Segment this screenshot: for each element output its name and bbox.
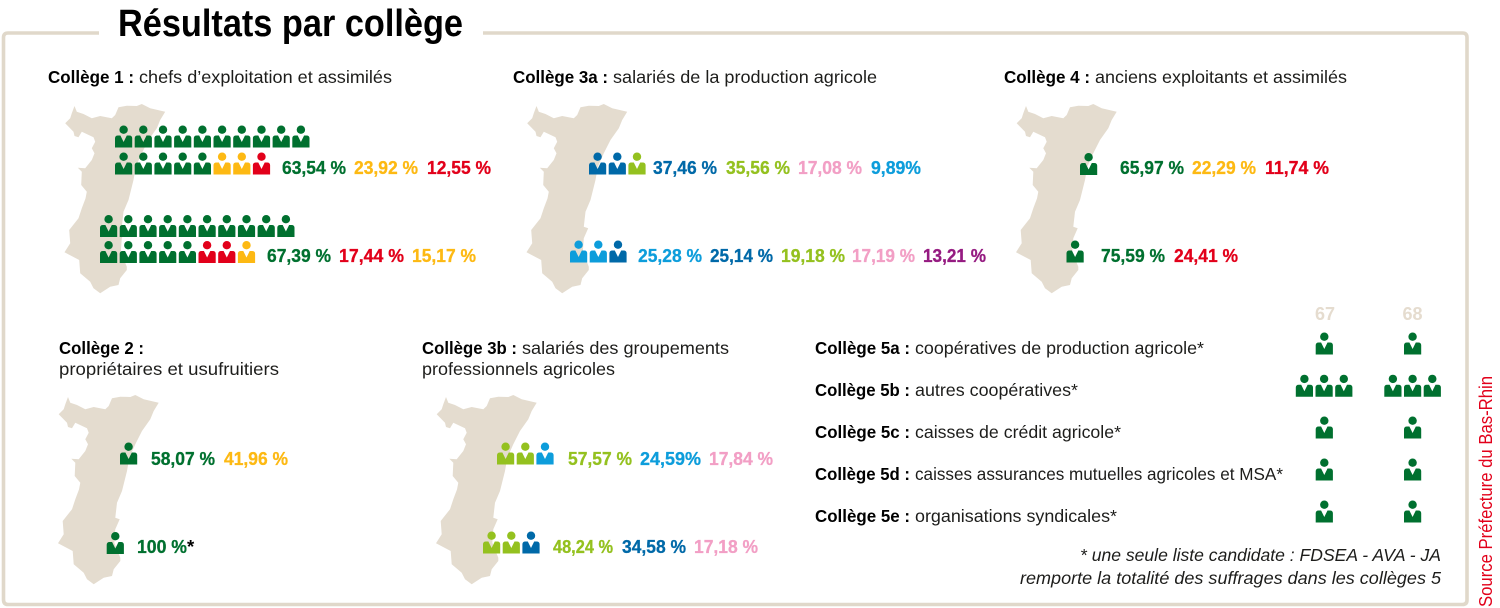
- percentages: Haut-Rhin collège 3b: 34,58 %: [622, 536, 686, 557]
- footnote: * une seule liste candidate : FDSEA - AVA - JA: [1080, 545, 1441, 565]
- percentage: Haut-Rhin collège 2: *: [187, 536, 195, 557]
- percentages: Bas-Rhin collège 4: [1120, 157, 1329, 178]
- icons: Haut-Rhin collège 3a: [570, 240, 627, 262]
- panel: collège 3b: [422, 338, 773, 584]
- heading: collège 1: chefs d’exploitation et assimilés: [139, 67, 392, 87]
- row: collège 5a: [815, 332, 1421, 358]
- percentages: Haut-Rhin collège 3a: 13,21 %: [923, 245, 986, 266]
- heading: collège 3a: salariés de la production agricole: [613, 67, 877, 87]
- icon: Bas-Rhin collège 2: [120, 442, 137, 464]
- row: collège 5b: [815, 375, 1441, 400]
- percentages: Haut-Rhin collège 1: 67,39 %: [267, 245, 331, 266]
- heading: collège 2: [59, 338, 279, 379]
- map: collège 4: [1016, 104, 1117, 293]
- percentages: Bas-Rhin collège 3a: [653, 157, 921, 178]
- icons: Haut-Rhin collège 3b: [483, 532, 540, 554]
- panel: collège 1: [48, 67, 491, 293]
- panel: collèges 5: [815, 304, 1441, 588]
- heading: collège 3b: professionnels agricoles: [422, 359, 615, 379]
- percentages: Haut-Rhin collège 3b: 17,18 %: [694, 536, 758, 557]
- percentages: Bas-Rhin collège 3b: 57,57 %: [568, 448, 632, 469]
- percentages: Bas-Rhin collège 2: 41,96 %: [224, 448, 288, 469]
- footnote: [1020, 545, 1441, 588]
- percentages: Bas-Rhin collège 1: 12,55 %: [427, 157, 491, 178]
- percentages: Bas-Rhin collège 4: 11,74 %: [1265, 157, 1329, 178]
- percentages: Bas-Rhin collège 3b: 17,84 %: [709, 448, 773, 469]
- percentages: Bas-Rhin collège 1: 63,54 %: [282, 157, 346, 178]
- map: collège 2: [58, 395, 159, 584]
- icons: Bas-Rhin collège 1: [115, 126, 310, 174]
- panel: collège 2: [58, 338, 288, 584]
- icon: Bas-Rhin collège 4: [1080, 153, 1097, 175]
- map: collège 3a: [526, 104, 627, 293]
- percentages: Haut-Rhin collège 4: 24,41 %: [1174, 245, 1238, 266]
- panel: collège 4: [1004, 67, 1347, 293]
- percentages: Haut-Rhin collège 3b: 48,24 %: [553, 536, 613, 557]
- column header: 67: 67: [1315, 304, 1335, 324]
- footnote: remporte la totalité des suffrages dans les collèges 5: [1020, 568, 1441, 588]
- row: collège 5d: caisses assurances mutuelles agricoles et MSA*: [915, 464, 1283, 484]
- percentages: Haut-Rhin collège 1: [267, 245, 476, 266]
- heading: collège 2: Collège 2 :: [59, 338, 144, 358]
- row: collège 5c: Collège 5c :: [815, 422, 910, 442]
- percentages: Bas-Rhin collège 1: 23,92 %: [354, 157, 418, 178]
- percentages: Bas-Rhin collège 3a: 17,08 %: [798, 157, 862, 178]
- percentages: Haut-Rhin collège 3a: 25,28 %: [638, 245, 702, 266]
- row: collège 5e: Collège 5e :: [815, 506, 910, 526]
- row: collège 5b: autres coopératives*: [915, 380, 1078, 400]
- row: collège 5c: caisses de crédit agricole*: [915, 422, 1121, 442]
- heading: collège 3b: [422, 338, 729, 379]
- percentages: Bas-Rhin collège 3a: 35,56 %: [726, 157, 790, 178]
- percentages: Bas-Rhin collège 3a: 9,89%: [871, 157, 921, 178]
- row: collège 5d: [815, 458, 1421, 484]
- percentages: Bas-Rhin collège 3b: [568, 448, 773, 469]
- percentages: Bas-Rhin collège 4: 65,97 %: [1120, 157, 1184, 178]
- map: collège 1: [64, 104, 165, 293]
- percentages: Haut-Rhin collège 3a: 25,14 %: [710, 245, 773, 266]
- icon: Haut-Rhin collège 2: [107, 532, 124, 554]
- percentages: Bas-Rhin collège 2: 58,07 %: [151, 448, 215, 469]
- row: collège 5b: Collège 5b :: [815, 380, 910, 400]
- panel: collège 3a: [513, 67, 986, 293]
- percentages: Bas-Rhin collège 3a: 37,46 %: [653, 157, 717, 178]
- heading: collège 4: anciens exploitants et assimilés: [1095, 67, 1347, 87]
- column header: 68: 68: [1402, 304, 1423, 324]
- percentages: Bas-Rhin collège 2: [151, 448, 288, 469]
- row: collège 5e: [815, 500, 1421, 526]
- icons: Bas-Rhin collège 3b: [497, 442, 554, 464]
- row: collège 5d: Collège 5d :: [815, 464, 910, 484]
- percentages: Haut-Rhin collège 4: 75,59 %: [1101, 245, 1165, 266]
- percentages: Bas-Rhin collège 4: 22,29 %: [1192, 157, 1256, 178]
- percentages: Bas-Rhin collège 1: [282, 157, 491, 178]
- percentages: Haut-Rhin collège 3a: 19,18 %: [781, 245, 845, 266]
- title: Résultats par collège: [118, 3, 463, 45]
- percentages: Haut-Rhin collège 3b: [553, 536, 758, 557]
- heading: collège 4: Collège 4 :: [1004, 67, 1090, 87]
- percentages: Bas-Rhin collège 3b: 24,59%: [640, 448, 701, 469]
- row: collège 5a: Collège 5a :: [815, 338, 910, 358]
- heading: collège 3a: Collège 3a :: [513, 67, 608, 87]
- percentages: Haut-Rhin collège 1: 17,44 %: [339, 245, 404, 266]
- percentages: Haut-Rhin collège 3a: [638, 245, 986, 266]
- icon: Haut-Rhin collège 4: [1066, 240, 1084, 262]
- icons: Bas-Rhin collège 3a: [589, 152, 646, 174]
- row: collège 5a: coopératives de production agricole*: [915, 338, 1204, 358]
- percentage: Haut-Rhin collège 2: 100 %: [137, 536, 187, 557]
- heading: collège 1: Collège 1 :: [48, 67, 134, 87]
- percentages: Haut-Rhin collège 1: 15,17 %: [412, 245, 476, 266]
- map: collège 3b: [436, 395, 537, 584]
- source credit: Source Préfecture du Bas-Rhin: [1475, 376, 1496, 607]
- row: collège 5e: organisations syndicales*: [915, 506, 1117, 526]
- percentages: Haut-Rhin collège 3a: 17,19 %: [852, 245, 915, 266]
- heading: collège 2: propriétaires et usufruitiers: [59, 359, 279, 379]
- percentages: Haut-Rhin collège 4: [1101, 245, 1238, 266]
- heading: collège 3b: Collège 3b :: [422, 338, 517, 358]
- icons: Haut-Rhin collège 1: [100, 215, 294, 263]
- heading: collège 3b: salariés des groupements: [522, 338, 729, 358]
- row: collège 5c: [815, 416, 1421, 442]
